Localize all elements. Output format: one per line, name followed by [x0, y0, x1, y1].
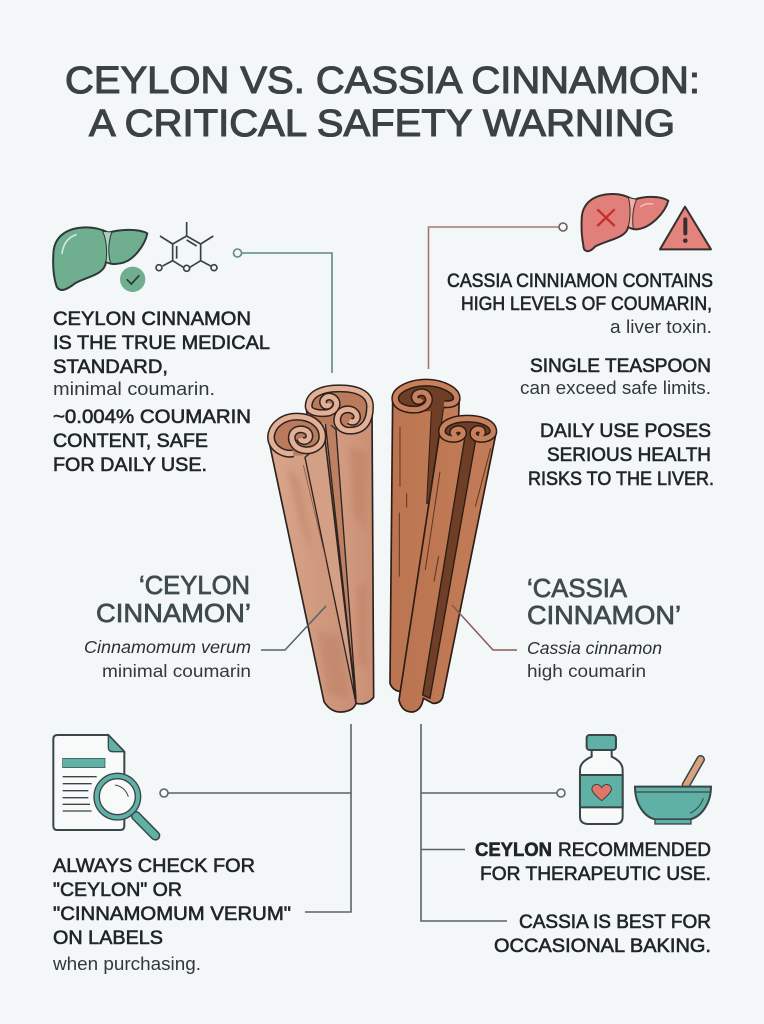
label: cassia cinnamon: Cassia cinnamon — [527, 638, 662, 658]
text: usage recommendation: CEYLON — [475, 839, 552, 861]
title: A CRITICAL SAFETY WARNING — [89, 103, 675, 145]
text: usage recommendation — [475, 839, 711, 957]
icon: damaged liver — [582, 194, 668, 251]
text: ceylon benefits: minimal coumarin. — [53, 379, 215, 399]
text: ceylon benefits: ~0.004% COUMARIN — [53, 406, 251, 428]
connector: cassia risks — [428, 227, 559, 369]
text: cassia risks: can exceed safe limits. — [520, 378, 711, 398]
label: ceylon cinnamon — [84, 572, 251, 681]
panel: ceylon benefits — [53, 222, 332, 476]
text: usage recommendation: FOR THERAPEUTIC USE. — [480, 863, 711, 885]
text: ceylon benefits: CEYLON CINNAMON — [53, 308, 251, 330]
label: cassia cinnamon — [527, 575, 681, 681]
text: label check: "CEYLON" OR — [53, 879, 182, 901]
text: ceylon benefits: FOR DAILY USE. — [53, 454, 207, 476]
text: cassia risks: HIGH LEVELS OF COUMARIN, — [461, 293, 712, 315]
illustration: ceylon cinnamon sticks — [268, 387, 374, 712]
text: cassia risks: CASSIA CINNIAMON CONTAINS — [447, 270, 713, 292]
icon: coumarin molecule — [156, 222, 217, 271]
text: usage recommendation: CASSIA IS BEST FOR — [519, 911, 711, 933]
text: cassia risks: a liver toxin. — [610, 317, 712, 337]
text: cassia risks: DAILY USE POSES — [540, 420, 711, 442]
text: ceylon benefits — [53, 308, 270, 476]
connector: label check — [168, 724, 351, 912]
text: usage recommendation: RECOMMENDED — [558, 839, 711, 861]
label: ceylon cinnamon: ‘CEYLON — [139, 572, 250, 600]
text: label check: ALWAYS CHECK FOR — [53, 855, 255, 877]
title — [65, 60, 700, 145]
connector dot — [160, 789, 168, 797]
text: label check: ON LABELS — [53, 927, 163, 949]
connector: ceylon benefits — [242, 253, 332, 373]
title: CEYLON VS. CASSIA CINNAMON: — [65, 60, 700, 102]
connector dot — [559, 223, 567, 231]
panel: label check — [52, 724, 351, 974]
connector dot — [234, 249, 242, 257]
text: ceylon benefits: CONTENT, SAFE — [53, 430, 208, 452]
text: cassia risks: SERIOUS HEALTH — [547, 444, 711, 466]
text: cassia risks: RISKS TO THE LIVER. — [528, 468, 714, 490]
text: ceylon benefits: STANDARD, — [53, 356, 168, 378]
label: cassia cinnamon: CINNAMON’ — [527, 602, 681, 630]
connector: usage recommendation — [421, 724, 557, 921]
text: label check: "CINNAMOMUM VERUM" — [53, 903, 291, 925]
text: ceylon benefits: IS THE TRUE MEDICAL — [53, 332, 270, 354]
icon: healthy liver — [53, 227, 147, 292]
text: cassia risks — [447, 270, 714, 490]
icon: mixing bowl — [635, 759, 711, 824]
text: cassia risks: SINGLE TEASPOON — [530, 355, 711, 377]
icon: warning triangle — [660, 207, 711, 249]
label: ceylon cinnamon: CINNAMON’ — [96, 600, 251, 628]
label: cassia cinnamon: high coumarin — [527, 661, 646, 681]
leader line: cassia — [452, 605, 517, 650]
icon: supplement bottle — [580, 735, 623, 824]
leader line: ceylon — [261, 606, 326, 650]
text: label check — [52, 855, 291, 974]
text: label check: when purchasing. — [52, 954, 201, 974]
icon: document with magnifier — [53, 735, 155, 836]
label: ceylon cinnamon: minimal coumarin — [102, 661, 251, 681]
label: ceylon cinnamon: Cinnamomum verum — [84, 637, 251, 657]
connector dot — [557, 789, 565, 797]
label: cassia cinnamon: ‘CASSIA — [527, 575, 627, 603]
illustration: cassia cinnamon sticks — [390, 383, 496, 712]
panel: usage recommendation — [421, 724, 711, 957]
panel: cassia risks — [428, 194, 714, 490]
text: usage recommendation: OCCASIONAL BAKING. — [494, 935, 711, 957]
